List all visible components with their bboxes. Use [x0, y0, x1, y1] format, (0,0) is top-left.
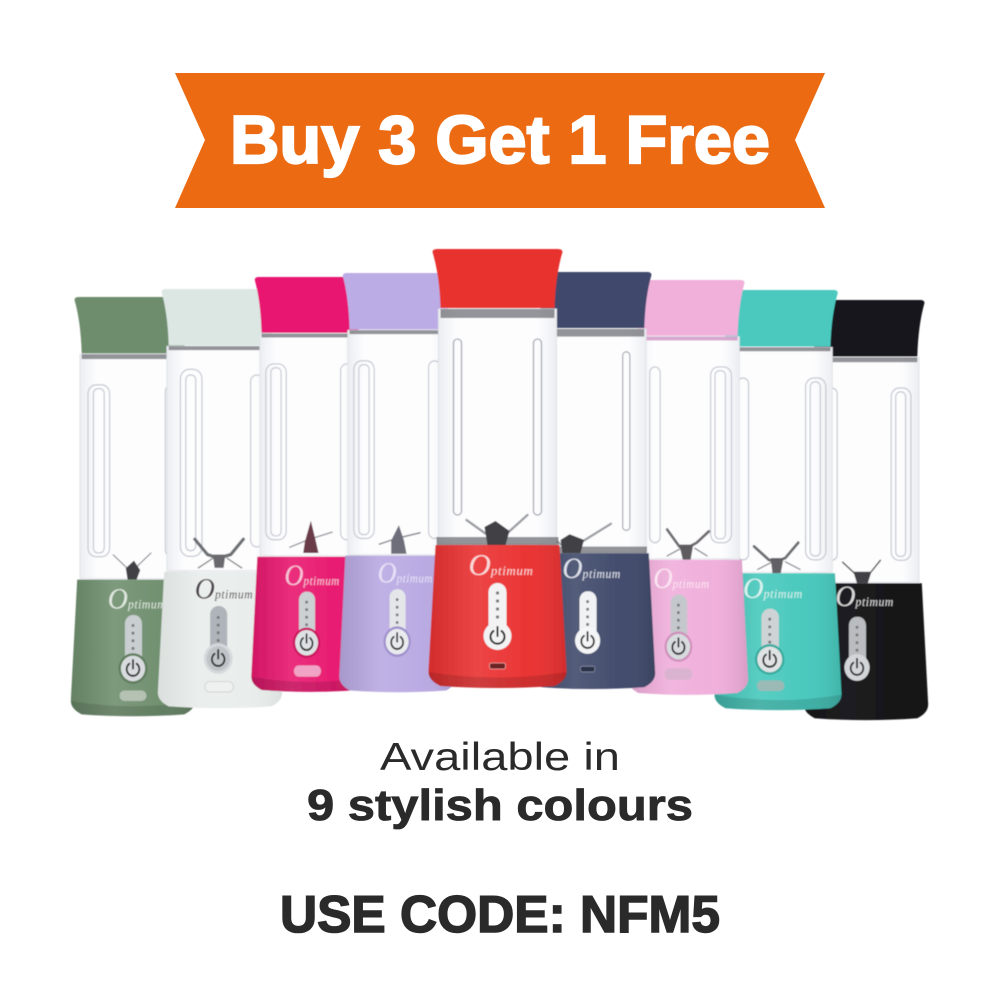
- glass jar: [539, 329, 647, 553]
- base: [714, 573, 842, 710]
- glass jar: [813, 357, 919, 582]
- blades: [290, 521, 332, 553]
- blender: hot pink: [251, 277, 369, 692]
- control panel: [755, 609, 784, 691]
- base: [628, 560, 748, 695]
- logo: Optimum: [562, 552, 621, 585]
- cap: [432, 249, 562, 308]
- blades: [754, 543, 800, 573]
- logo: Optimum: [195, 573, 253, 606]
- cap: [343, 273, 453, 329]
- logo: Optimum: [743, 573, 803, 605]
- text: 9 stylish colours: 9 stylish colours: [307, 781, 693, 830]
- logo: Optimum: [653, 563, 710, 595]
- blades: [843, 560, 880, 583]
- logo: Optimum: [284, 560, 340, 592]
- base: [531, 553, 655, 689]
- control panel: [384, 589, 411, 657]
- glass jar: [724, 347, 832, 572]
- cap: [74, 297, 192, 353]
- control panel: [119, 615, 147, 701]
- blades: [195, 539, 243, 568]
- glass jar: [167, 346, 273, 571]
- cap: [718, 290, 838, 346]
- text: USE CODE: NFM5: USE CODE: NFM5: [280, 886, 720, 944]
- base: [71, 580, 195, 716]
- cap: [534, 272, 652, 328]
- base: [158, 572, 282, 708]
- base: [804, 583, 928, 720]
- blender: black: [804, 300, 928, 720]
- cap: [631, 280, 745, 336]
- control panel: [844, 617, 870, 681]
- logo: Optimum: [468, 547, 534, 582]
- glass jar: [637, 337, 739, 559]
- blender: light pink: [628, 280, 748, 695]
- cap: [808, 300, 924, 356]
- logo: Optimum: [378, 557, 433, 590]
- blades: [541, 524, 611, 553]
- control panel: [484, 583, 512, 669]
- blender: navy: [531, 272, 655, 689]
- blades: [466, 515, 528, 545]
- product group: nine blenders: [71, 249, 928, 720]
- blades: [379, 525, 420, 554]
- banner: Buy 3 Get 1 Free: Buy 3 Get 1 Free: [230, 102, 770, 178]
- blender: lavender: [339, 273, 457, 692]
- text: Available in: Available in: [380, 736, 620, 779]
- control panel: [204, 606, 234, 692]
- blender: sage green: [71, 297, 195, 716]
- control panel: [665, 595, 692, 680]
- glass jar: [436, 309, 558, 545]
- blades: [667, 529, 709, 560]
- blender: pale grey white: [158, 289, 282, 708]
- control panel: [293, 592, 321, 677]
- control panel: [575, 591, 600, 672]
- base: [251, 557, 369, 692]
- blender: teal: [714, 290, 842, 710]
- glass jar: [260, 334, 360, 556]
- logo: Optimum: [108, 583, 166, 616]
- base: [428, 545, 567, 688]
- glass jar: [348, 330, 448, 555]
- logo: Optimum: [835, 580, 894, 613]
- base: [339, 556, 457, 692]
- glass jar: [80, 354, 186, 579]
- blender: red hero: [428, 249, 567, 688]
- cap: [255, 277, 365, 333]
- banner: Buy 3 Get 1 Free: [175, 73, 825, 208]
- cap: [162, 289, 278, 345]
- blades: [113, 553, 151, 580]
